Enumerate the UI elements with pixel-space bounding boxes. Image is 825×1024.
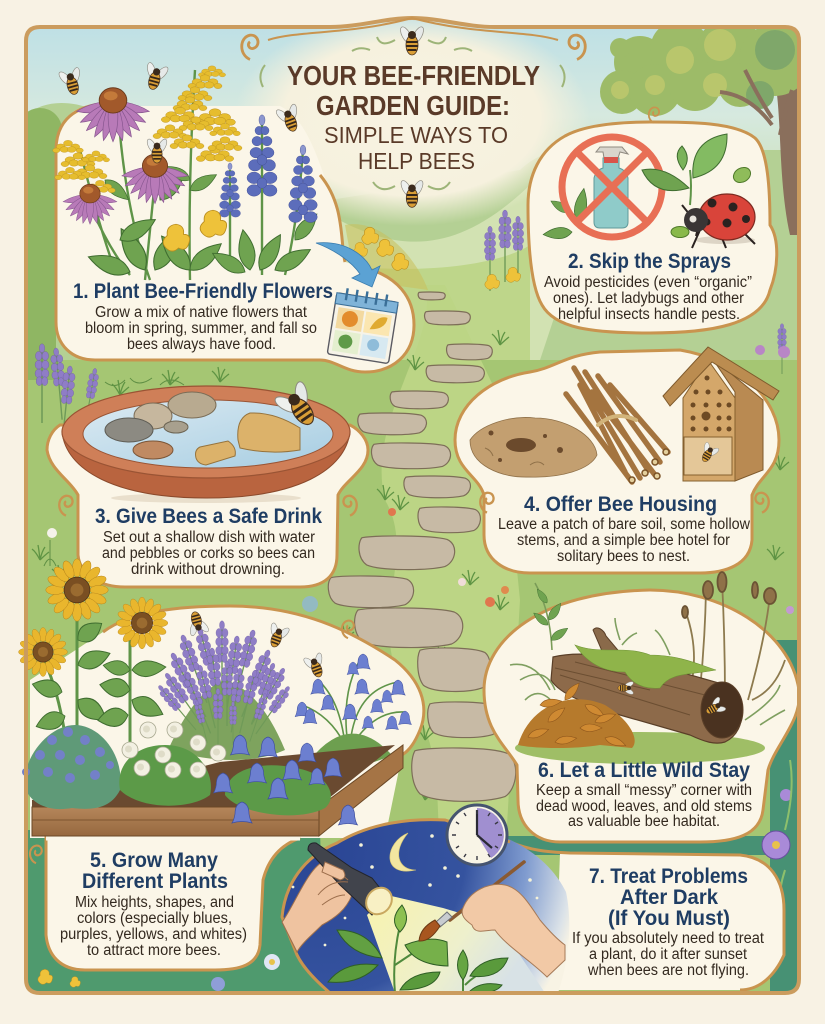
title scroll right — [569, 35, 585, 59]
icon: ladybug and aphids — [671, 164, 755, 248]
stepping stone path — [328, 292, 516, 801]
heading 5: Different Plants — [82, 870, 228, 893]
panel 5: grow many plants — [19, 559, 424, 970]
description 1 — [85, 304, 317, 353]
title — [287, 60, 540, 174]
description 4: stems, and a simple bee hotel for — [517, 532, 730, 549]
flying bee 1 — [56, 65, 87, 98]
bee on coneflower — [145, 138, 169, 163]
description 1: bees always have food. — [127, 336, 276, 353]
heading 1: 1. Plant Bee-Friendly Flowers — [73, 280, 333, 303]
title glow — [248, 20, 577, 222]
flying bee 2 — [140, 60, 171, 93]
panel 3: safe drink — [47, 377, 368, 587]
path flowers — [302, 508, 509, 612]
panel 1: plant bee-friendly flowers — [53, 66, 414, 372]
grass tufts — [32, 330, 789, 800]
description 6 — [536, 782, 752, 830]
description 7: when bees are not flying. — [587, 962, 749, 979]
lavender clump — [155, 621, 293, 760]
description 1: Grow a mix of native flowers that — [95, 304, 308, 321]
title flourishes — [260, 37, 565, 189]
mossy log — [551, 628, 743, 743]
description 1: bloom in spring, summer, and fall so — [85, 320, 317, 337]
coneflowers — [63, 88, 189, 224]
bluebells — [295, 654, 412, 766]
description 4: solitary bees to nest. — [557, 548, 690, 565]
goldenrod — [53, 66, 242, 193]
heading 5: 5. Grow Many — [90, 849, 218, 872]
sunflowers — [19, 559, 168, 745]
title: GARDEN GUIDE: — [316, 90, 510, 121]
icon: bare soil patch — [470, 417, 597, 477]
right side blossoms — [44, 324, 794, 930]
icon: blue arrow — [316, 243, 380, 287]
description 3: drink without drowning. — [131, 561, 285, 578]
description 4 — [498, 516, 751, 565]
heading 7: After Dark — [620, 886, 718, 909]
description 4: Leave a patch of bare soil, some hollow — [498, 516, 751, 533]
corner curls — [480, 493, 769, 513]
corner curls — [30, 621, 354, 863]
description 3: Set out a shallow dish with water — [103, 529, 315, 546]
description 3: and pebbles or corks so bees can — [102, 545, 315, 562]
night scene — [282, 805, 569, 993]
icon: plant sprig — [642, 134, 727, 205]
heading 5 — [82, 849, 228, 893]
left hedge — [28, 108, 61, 380]
panel 4: bee housing — [455, 347, 779, 573]
right teal band — [500, 640, 799, 993]
description 3 — [102, 529, 315, 578]
lupines — [220, 115, 317, 222]
small bees — [184, 609, 330, 681]
hand with paintbrush — [419, 862, 565, 977]
description 7: a plant, do it after sunset — [589, 946, 748, 963]
crescent moon — [390, 833, 416, 871]
flashlight beam — [367, 895, 545, 993]
plant — [328, 905, 508, 993]
icon: clock — [447, 805, 507, 865]
icon: lower ornament bee — [399, 179, 425, 207]
description 5: to attract more bees. — [87, 942, 221, 959]
description 5: Mix heights, shapes, and — [75, 894, 234, 911]
icon: hollow stem bundle — [566, 368, 669, 483]
heading 7 — [589, 865, 748, 930]
description 5 — [60, 894, 247, 959]
panel 2: skip the sprays — [528, 107, 777, 333]
description 2: Avoid pesticides (even “organic” — [544, 274, 752, 291]
description 2: ones). Let ladybugs and other — [553, 290, 744, 307]
description 2 — [544, 274, 752, 323]
description 6: Keep a small “messy” corner with — [536, 782, 752, 799]
curl ornament — [649, 107, 659, 123]
description 7: If you absolutely need to treat — [572, 930, 765, 947]
description 5: purples, yellows, and whites) — [60, 926, 247, 943]
hand with flashlight — [282, 843, 397, 952]
heading 6: 6. Let a Little Wild Stay — [538, 759, 750, 782]
stars — [292, 834, 538, 946]
heading 4: 4. Offer Bee Housing — [524, 493, 717, 516]
icon: crossed spray bottle — [543, 137, 662, 240]
bottom green band — [26, 830, 325, 993]
icon: bee hotel — [663, 347, 779, 481]
bed plants — [22, 722, 358, 825]
yellow flowers — [163, 210, 227, 251]
corner curls — [59, 496, 357, 516]
heading 7: (If You Must) — [608, 907, 730, 930]
icon: water dish with pebbles and corks — [62, 377, 350, 503]
heading 7: 7. Treat Problems — [589, 865, 748, 888]
description 5: colors (especially blues, — [77, 910, 232, 927]
fallen leaf pile — [518, 681, 635, 749]
panel 7: treat problems after dark — [282, 805, 784, 993]
heading 2: 2. Skip the Sprays — [568, 250, 731, 273]
flower stems and leaves — [80, 70, 322, 280]
purple meadow flowers left — [34, 344, 184, 424]
description 6: as valuable bee habitat. — [568, 813, 720, 830]
ground patch — [515, 732, 765, 764]
tree top right — [600, 29, 797, 235]
title scroll left — [242, 35, 258, 59]
raised garden bed — [32, 745, 403, 836]
description 7 — [572, 930, 765, 979]
panel 6: let a little wild stay — [484, 572, 799, 842]
icon: seasonal calendar — [327, 287, 399, 364]
title: HELP BEES — [358, 148, 475, 174]
icon: top ornament bee — [398, 25, 426, 55]
distant hedges — [36, 103, 797, 360]
heading 3: 3. Give Bees a Safe Drink — [95, 505, 322, 528]
title: YOUR BEE-FRIENDLY — [287, 60, 540, 91]
title: SIMPLE WAYS TO — [324, 122, 508, 148]
dried stems and grasses — [510, 572, 785, 725]
flying bee 3 — [273, 102, 306, 135]
meadow flowers mid right — [345, 210, 524, 291]
description 2: helpful insects handle pests. — [558, 306, 740, 323]
description 6: dead wood, leaves, and old stems — [536, 798, 752, 815]
bottom border flowers — [38, 954, 280, 991]
